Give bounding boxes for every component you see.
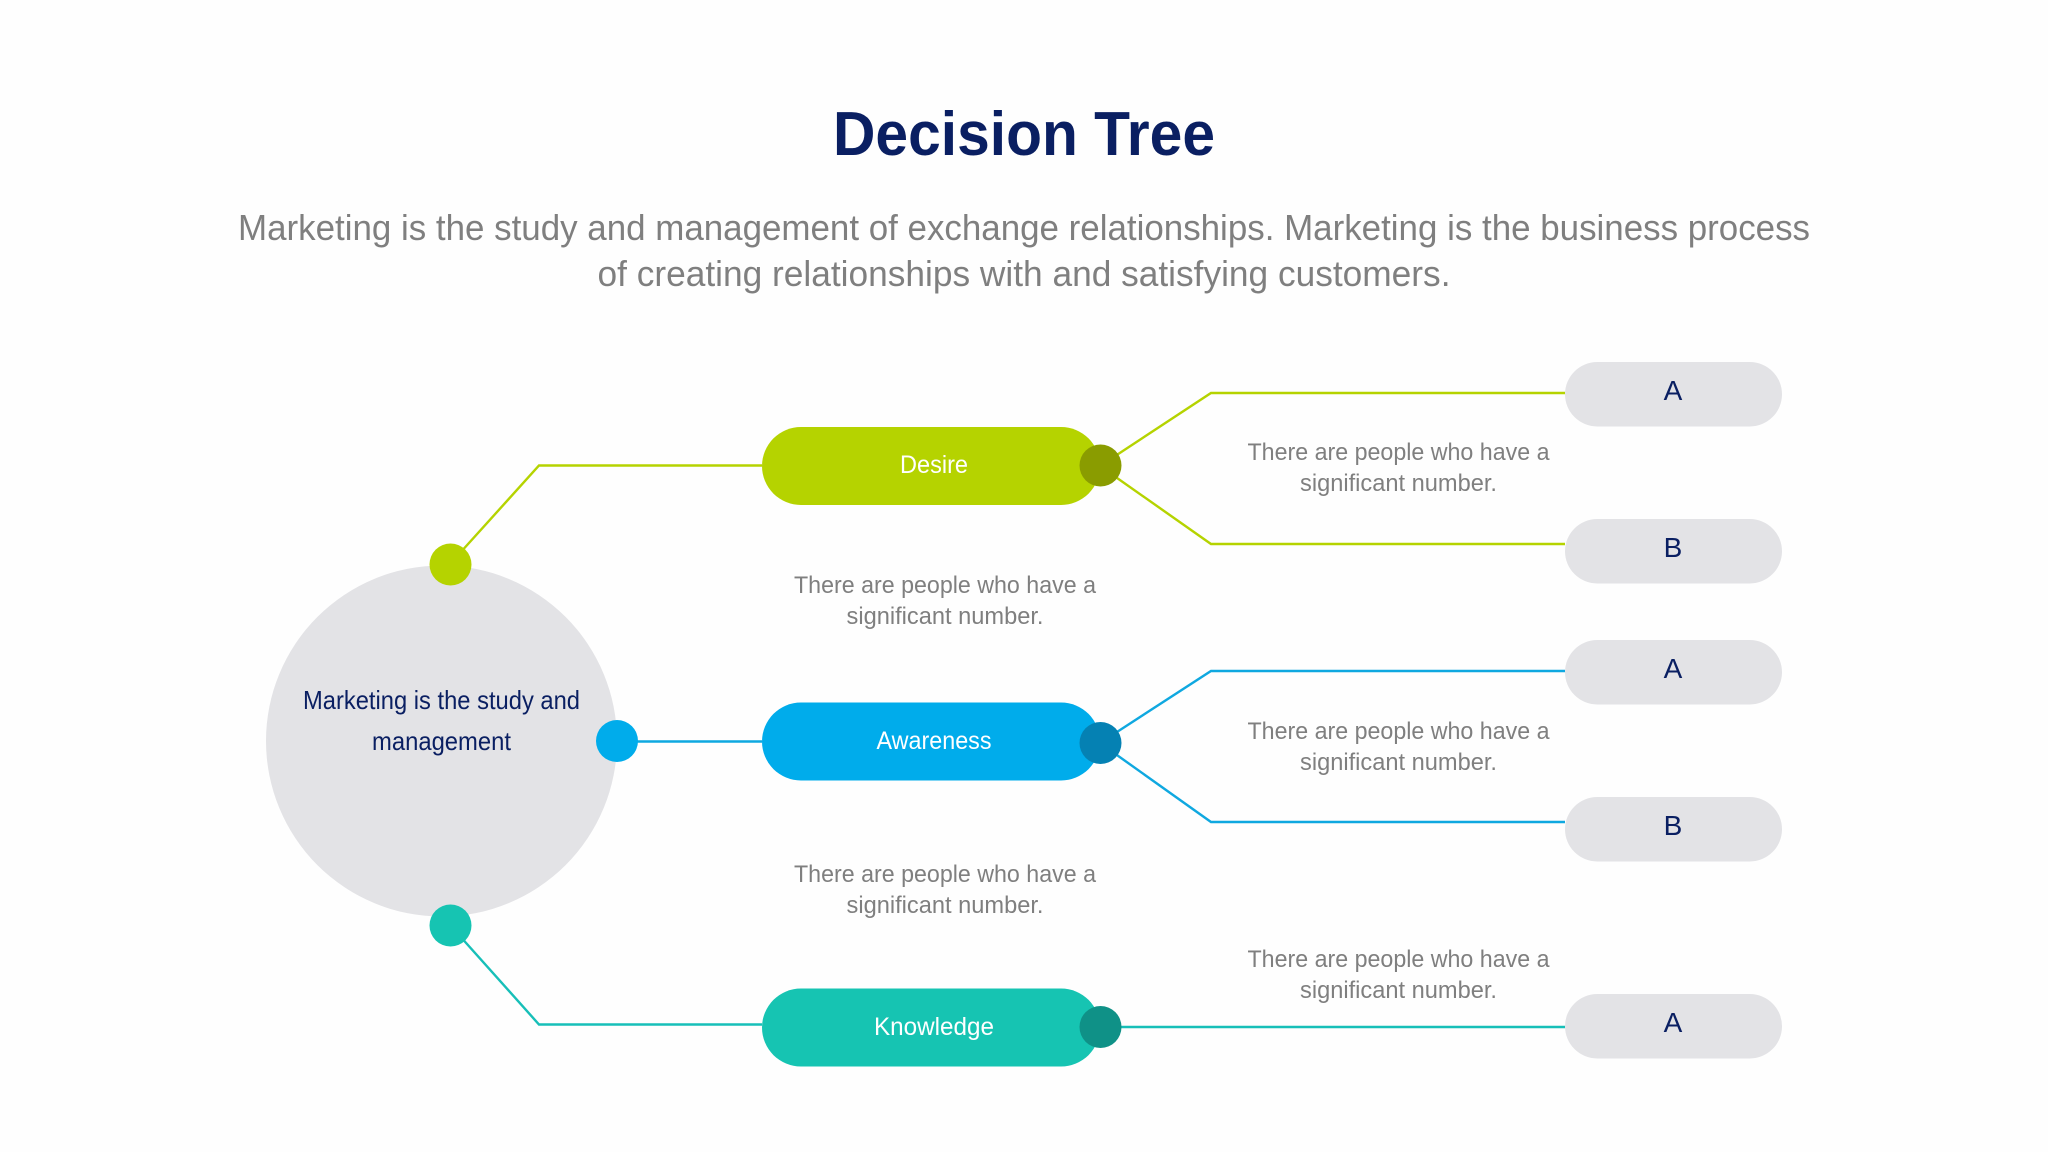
central circle text: management	[372, 726, 512, 756]
connector: Desire to A and B	[1100, 393, 1565, 544]
pill: Awareness: Awareness	[876, 727, 992, 755]
pill: Desire: Desire	[900, 451, 968, 479]
text block: right middle: There are people who have a	[1248, 718, 1550, 745]
outcome pill: Knowledge A	[1565, 994, 1782, 1058]
text block: middle lower: significant number.	[846, 892, 1044, 919]
connector: circle to Awareness	[617, 740, 762, 743]
pill: Awareness	[762, 702, 1122, 780]
outcome pill: Knowledge A: A	[1664, 1007, 1683, 1038]
subtitle text block	[238, 207, 1810, 294]
connector: Awareness to A and B	[1100, 671, 1565, 822]
central circle text: Marketing is the study and	[303, 685, 580, 715]
pill: Desire	[762, 427, 1122, 505]
text block: right lower: significant number.	[1300, 977, 1497, 1004]
text block: right upper: There are people who have a	[1248, 439, 1550, 466]
connector: circle to Knowledge	[450, 925, 762, 1024]
subtitle text block: Marketing is the study and management of exchange relationships. Marketing is the business process	[238, 207, 1810, 248]
outcome pill: Awareness A	[1565, 640, 1782, 704]
text block: middle upper: There are people who have a	[794, 572, 1097, 599]
outcome pill: Awareness B	[1565, 797, 1782, 862]
pill: Knowledge	[762, 988, 1122, 1066]
connector: Knowledge to A	[1100, 1026, 1565, 1028]
node: blue dot	[596, 720, 638, 762]
text block: right middle: significant number.	[1300, 749, 1497, 776]
text block: middle upper: significant number.	[846, 603, 1044, 630]
pill: Knowledge: Knowledge	[874, 1013, 994, 1041]
outcome pill: Desire B: B	[1664, 532, 1682, 563]
text block: right upper: significant number.	[1300, 470, 1497, 497]
text block: middle upper	[794, 572, 1097, 630]
text block: right middle	[1248, 718, 1550, 776]
outcome pill: Awareness A: A	[1664, 653, 1683, 684]
text block: middle lower	[794, 861, 1097, 919]
subtitle text block: of creating relationships with and satisfying customers.	[598, 253, 1450, 294]
outcome pill: Desire A: A	[1664, 375, 1683, 406]
title: Decision Tree	[833, 100, 1215, 169]
outcome pill: Desire A	[1565, 362, 1782, 426]
connector: circle to Desire	[450, 466, 762, 564]
node: green dot	[430, 544, 472, 586]
text block: right upper	[1248, 439, 1550, 497]
text block: right lower	[1248, 946, 1550, 1004]
node: teal dot	[430, 904, 472, 946]
text block: right lower: There are people who have a	[1248, 946, 1550, 973]
outcome pill: Awareness B: B	[1664, 810, 1682, 841]
central circle text	[303, 685, 580, 756]
outcome pill: Desire B	[1565, 519, 1782, 584]
central circle	[266, 566, 617, 916]
text block: middle lower: There are people who have a	[794, 861, 1097, 888]
